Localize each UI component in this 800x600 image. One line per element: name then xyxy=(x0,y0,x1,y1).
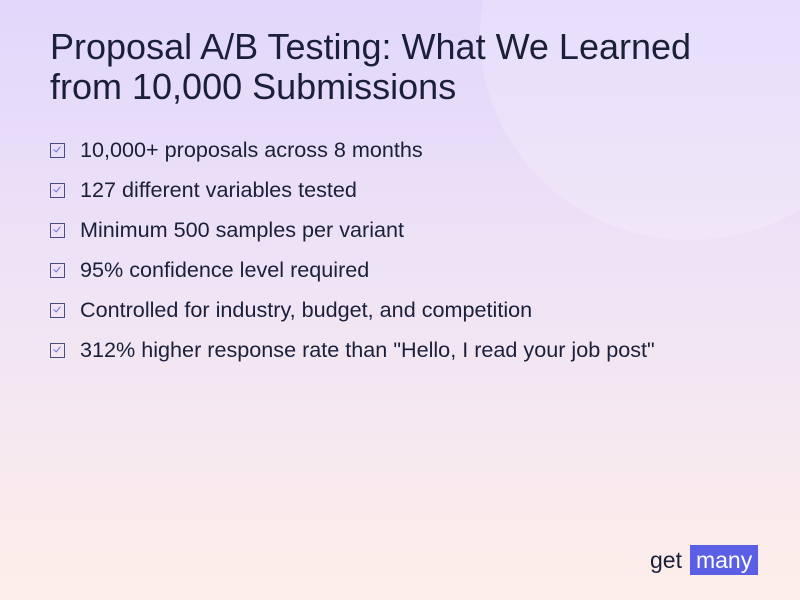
title: Proposal A/B Testing: What We Learned xyxy=(50,26,691,67)
item 5: Controlled for industry, budget, and competition xyxy=(80,297,532,322)
title xyxy=(50,26,691,107)
item 6: 312% higher response rate than "Hello, I read your job post" xyxy=(80,337,655,362)
item 2: 127 different variables tested xyxy=(80,177,357,202)
logo xyxy=(650,545,758,575)
title: from 10,000 Submissions xyxy=(50,66,456,107)
logo: many xyxy=(696,547,752,573)
logo: get xyxy=(650,546,682,572)
item 1: 10,000+ proposals across 8 months xyxy=(80,137,423,162)
item 4: 95% confidence level required xyxy=(80,257,369,282)
item 3: Minimum 500 samples per variant xyxy=(80,217,404,242)
checklist xyxy=(50,137,655,362)
